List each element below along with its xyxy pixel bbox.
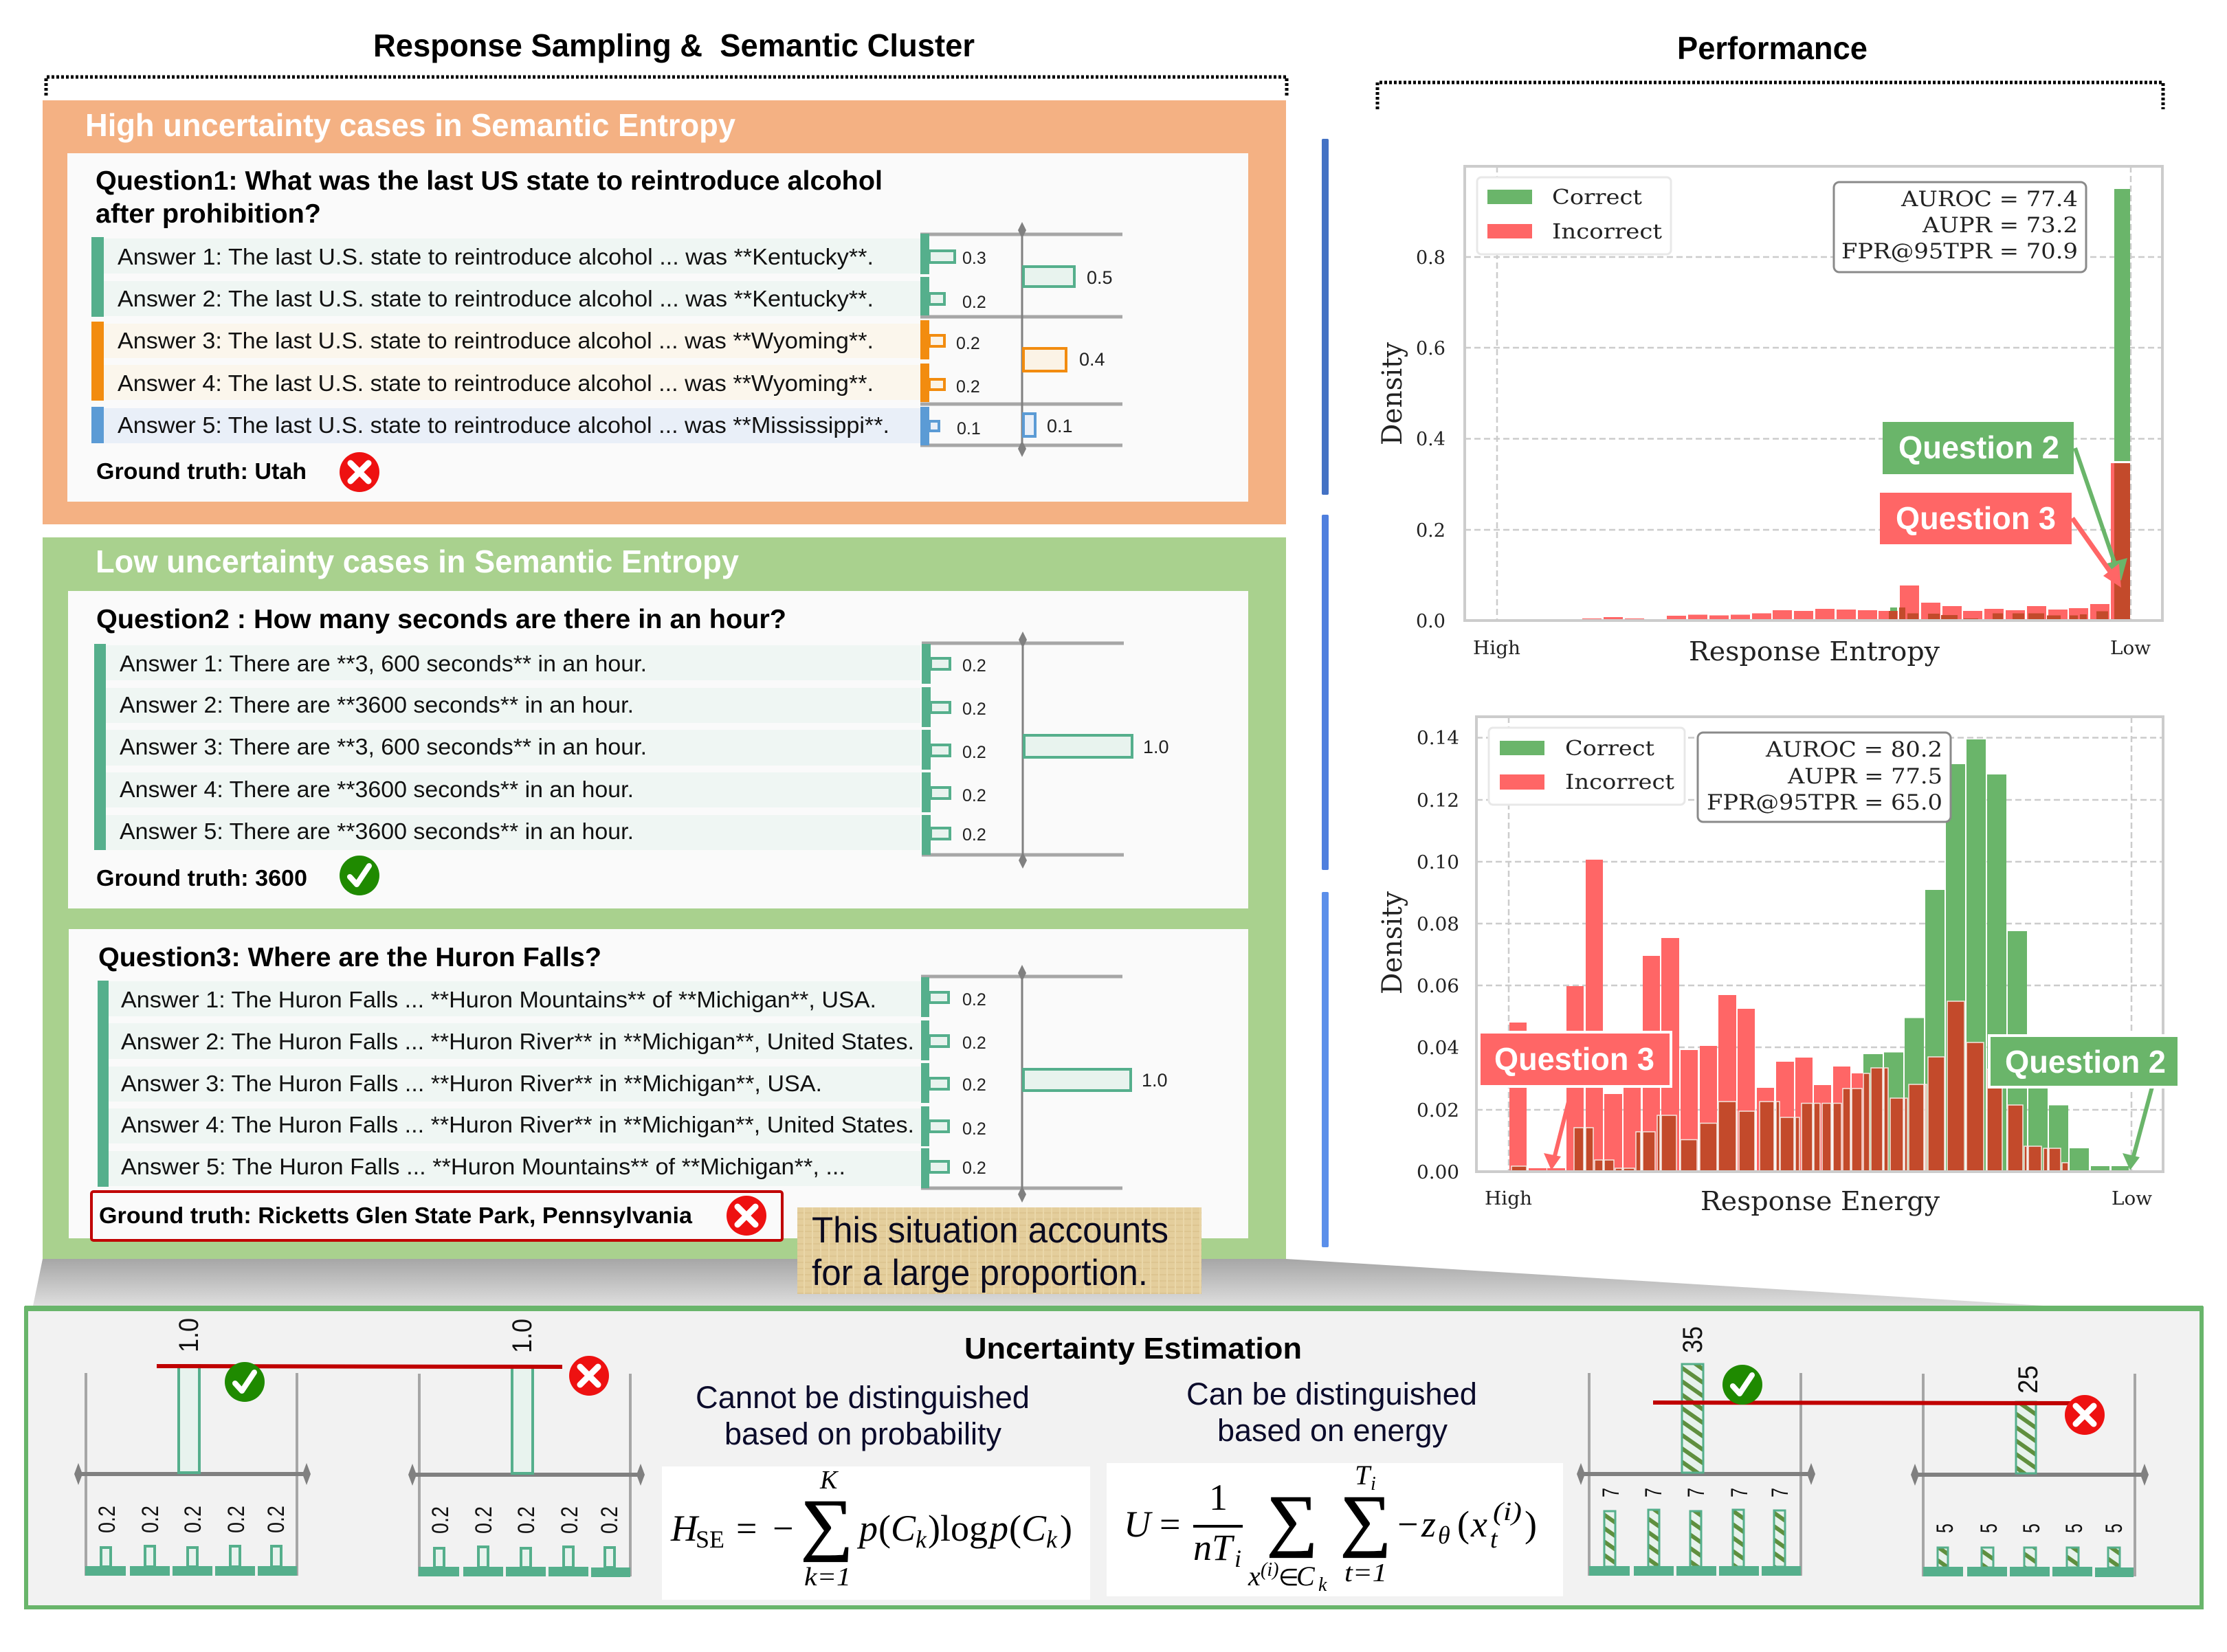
formula: energy: ( xyxy=(1457,1504,1470,1545)
formula: energy xyxy=(1107,1460,1563,1596)
formula: semantic entropy: K xyxy=(819,1466,839,1495)
callout: large proportion note: This situation accounts xyxy=(812,1210,1168,1251)
answers for question 1: Answer 1: The last U.S. state to reintroduce alcohol ... was **Kentucky**. xyxy=(118,244,874,269)
bar chart: probability, correct: 1.0 xyxy=(174,1318,204,1352)
y axis ticks: 0.10 xyxy=(1417,852,1459,873)
formula: semantic entropy: k xyxy=(916,1526,927,1553)
accent bar: light blue xyxy=(1322,892,1329,1247)
legend: Incorrect xyxy=(1552,220,1662,244)
bar chart: question 2 clusters: 0.2 xyxy=(962,743,986,762)
x axis labels: Response Energy xyxy=(1700,1186,1940,1216)
bar chart: question 3 clusters xyxy=(921,965,1168,1203)
formula: energy: T xyxy=(1355,1460,1372,1491)
x axis labels xyxy=(1473,636,2151,667)
formula: semantic entropy: SE xyxy=(696,1526,724,1553)
bar chart: probability, wrong: 1.0 xyxy=(507,1319,538,1353)
answers for question 2: Answer 2: There are **3600 seconds** in an hour. xyxy=(120,692,634,717)
x axis labels: Low xyxy=(2112,1188,2152,1209)
legend: Correct xyxy=(1552,186,1642,210)
card: question 2 xyxy=(68,591,1248,908)
icon: correct xyxy=(225,1362,265,1402)
heading: response sampling and semantic cluster: Response Sampling & Semantic Cluster xyxy=(373,27,975,63)
formula: energy: t xyxy=(1490,1525,1498,1554)
y axis ticks: 0.08 xyxy=(1417,914,1459,935)
bar chart: question 2 clusters: 1.0 xyxy=(1143,737,1169,757)
bar chart: probability, wrong: 0.2 xyxy=(557,1506,583,1534)
bar chart: probability, correct: 0.2 xyxy=(223,1506,250,1533)
panel: high uncertainty cases xyxy=(43,100,1286,524)
formula: energy: ) xyxy=(1525,1504,1537,1545)
bar chart: energy, correct: 7 xyxy=(1598,1488,1624,1497)
formula: energy: nT xyxy=(1193,1527,1235,1568)
stats box xyxy=(1698,733,1951,822)
bar chart: probability, wrong: 0.2 xyxy=(513,1506,540,1534)
chart: response entropy histogram xyxy=(1377,166,2162,667)
x axis labels: High xyxy=(1473,638,1520,659)
bar chart: energy, wrong: 5 xyxy=(2061,1523,2087,1533)
question 1 text: Question1: What was the last US state to reintroduce alcohol xyxy=(96,166,883,196)
x axis labels: Response Entropy xyxy=(1689,636,1940,667)
formula: energy: z xyxy=(1421,1504,1436,1545)
threshold line: probability xyxy=(157,1366,562,1367)
note: cannot be distinguished: based on probability xyxy=(724,1416,1001,1451)
y axis label: Density xyxy=(1377,891,1408,994)
bracket: performance section xyxy=(1377,82,2163,109)
bar chart: question 2 clusters: 0.2 xyxy=(962,825,986,845)
bar chart: energy, correct: 7 xyxy=(1683,1488,1709,1497)
heading: low uncertainty: Low uncertainty cases in Semantic Entropy xyxy=(96,544,739,579)
legend: Correct xyxy=(1565,737,1654,761)
bar chart: question 3 clusters: 0.2 xyxy=(962,1075,986,1095)
icon: wrong xyxy=(727,1196,766,1236)
bar chart: question 1 clusters: 0.2 xyxy=(962,293,986,312)
stats box: AUPR = 77.5 xyxy=(1787,764,1942,789)
label: question 3 with arrow xyxy=(1479,1032,1671,1170)
y axis ticks: 0.12 xyxy=(1417,790,1459,812)
panel: low uncertainty cases xyxy=(43,537,1286,1259)
bar chart: energy, correct: 7 xyxy=(1727,1488,1753,1497)
ground truth: Utah: Ground truth: Utah xyxy=(96,458,307,484)
bar chart: probability, wrong: 0.2 xyxy=(597,1506,623,1534)
y axis ticks: 0.6 xyxy=(1416,338,1445,359)
bar chart: question 3 clusters: 0.2 xyxy=(962,1119,986,1139)
stats box: AUROC = 80.2 xyxy=(1765,737,1942,762)
bar chart: energy, correct: 7 xyxy=(1767,1488,1793,1497)
legend xyxy=(1477,177,1671,254)
question 1 text: after prohibition? xyxy=(96,199,321,229)
answers for question 2 xyxy=(94,644,920,850)
callout: ground truth Ricketts Glen xyxy=(91,1192,782,1240)
label: question 2 with arrow xyxy=(1883,422,2127,581)
chart: response energy histogram xyxy=(1377,717,2179,1216)
formula: semantic entropy: C xyxy=(891,1508,916,1549)
bar chart: question 3 clusters: 0.2 xyxy=(962,990,986,1009)
card: question 3 xyxy=(69,929,1248,1238)
icon: wrong xyxy=(340,452,379,492)
formula: energy: ∑ xyxy=(1267,1482,1318,1558)
accent bar: mid blue xyxy=(1322,515,1329,870)
formula: semantic entropy: ( xyxy=(1009,1508,1021,1549)
note: can be distinguished xyxy=(1186,1376,1477,1448)
bar chart: probability, wrong: 0.2 xyxy=(428,1506,454,1534)
heading: performance: Performance xyxy=(1677,30,1868,66)
callout: ground truth Ricketts Glen: Ground truth: Ricketts Glen State Park, Pennsylvania xyxy=(99,1203,693,1228)
panel: uncertainty estimation xyxy=(25,1306,2203,1607)
card: question 1 xyxy=(67,153,1248,502)
note: can be distinguished: Can be distinguished xyxy=(1186,1376,1477,1411)
answers for question 3 xyxy=(98,981,920,1187)
heading: high uncertainty: High uncertainty cases in Semantic Entropy xyxy=(85,107,735,143)
stats box xyxy=(1834,182,2086,272)
y axis ticks: 0.04 xyxy=(1417,1038,1459,1059)
note: cannot be distinguished: Cannot be distinguished xyxy=(696,1380,1030,1415)
y axis ticks: 0.8 xyxy=(1416,247,1445,269)
y axis ticks: 0.14 xyxy=(1417,728,1459,749)
answers for question 2: Answer 3: There are **3, 600 seconds** in an hour. xyxy=(120,734,647,759)
stats box: FPR@95TPR = 70.9 xyxy=(1841,239,2078,264)
bar chart: question 1 clusters: 0.2 xyxy=(956,377,980,397)
bar chart: energy, correct: 35 xyxy=(1678,1326,1708,1353)
formula: energy: C xyxy=(1296,1561,1316,1592)
answers for question 2: Answer 5: There are **3600 seconds** in an hour. xyxy=(120,818,634,844)
bar chart: question 1 clusters: 0.1 xyxy=(957,419,981,438)
bars: incorrect xyxy=(1509,860,1870,1172)
formula: semantic entropy: ( xyxy=(878,1508,891,1549)
label: question 2 with arrow: Question 2 xyxy=(2005,1044,2166,1080)
answers for question 1 xyxy=(91,237,920,443)
bar chart: question 1 clusters: 0.4 xyxy=(1079,349,1105,370)
bar chart: probability, correct xyxy=(74,1318,311,1576)
bar chart: probability, correct: 0.2 xyxy=(137,1506,164,1533)
question 1 text xyxy=(96,166,883,229)
formula: energy: (i) xyxy=(1261,1559,1278,1581)
answers for question 3: Answer 3: The Huron Falls ... **Huron River** in **Michigan**, USA. xyxy=(121,1071,822,1096)
formula: energy: i xyxy=(1371,1473,1376,1495)
formula: energy: = xyxy=(1160,1504,1180,1545)
y axis ticks: 0.4 xyxy=(1416,429,1445,450)
y axis label: Density xyxy=(1377,342,1408,445)
formula: energy: ∑ xyxy=(1340,1482,1391,1558)
bar chart: question 1 clusters: 0.5 xyxy=(1087,267,1113,288)
bar chart: probability, wrong: 0.2 xyxy=(471,1506,497,1534)
bars: correct xyxy=(1890,189,2130,612)
bar chart: energy, wrong xyxy=(1911,1365,2149,1577)
bar chart: probability, correct: 0.2 xyxy=(94,1506,120,1533)
bar chart: question 2 clusters: 0.2 xyxy=(962,700,986,719)
bar chart: question 1 clusters xyxy=(920,222,1122,457)
answers for question 1: Answer 4: The last U.S. state to reintroduce alcohol ... was **Wyoming**. xyxy=(118,370,874,396)
formula: energy: 1 xyxy=(1209,1477,1228,1518)
label: question 2 with arrow: Question 2 xyxy=(1898,429,2059,465)
callout: large proportion note xyxy=(797,1207,1201,1294)
legend xyxy=(1489,728,1685,805)
formula: energy: x xyxy=(1248,1561,1261,1592)
bar chart: probability, correct: 0.2 xyxy=(263,1506,289,1533)
answers for question 3: Answer 5: The Huron Falls ... **Huron Mountains** of **Michigan**, ... xyxy=(121,1154,845,1179)
x axis labels xyxy=(1485,1186,2152,1216)
y axis ticks: 0.2 xyxy=(1416,520,1445,542)
formula: semantic entropy: = xyxy=(736,1508,757,1549)
bar chart: question 3 clusters: 0.2 xyxy=(962,1159,986,1178)
formula: semantic entropy: − xyxy=(773,1508,793,1549)
formula: semantic entropy: )log xyxy=(928,1508,988,1549)
formula: semantic entropy: ∑ xyxy=(801,1486,853,1562)
note: cannot be distinguished xyxy=(696,1380,1030,1451)
bar chart: question 3 clusters: 1.0 xyxy=(1142,1070,1168,1091)
question 3 text: Question3: Where are the Huron Falls? xyxy=(98,943,601,972)
question 2 text: Question2 : How many seconds are there in an hour? xyxy=(96,605,786,634)
bar chart: energy, wrong: 25 xyxy=(2013,1365,2043,1394)
formula: energy: (i) xyxy=(1493,1497,1522,1526)
accent bar: blue xyxy=(1322,139,1329,495)
y axis ticks: 0.00 xyxy=(1417,1162,1459,1183)
bar chart: probability, wrong xyxy=(408,1319,645,1577)
y axis ticks xyxy=(1416,247,1445,632)
bar chart: probability, correct: 0.2 xyxy=(180,1506,206,1533)
bars: overlap xyxy=(1511,1001,2068,1172)
connector: gray shadow from panels to uncertainty estimation xyxy=(32,1259,2043,1313)
formula: semantic entropy xyxy=(662,1466,1090,1600)
formula: energy: k xyxy=(1318,1574,1327,1596)
answers for question 3: Answer 2: The Huron Falls ... **Huron River** in **Michigan**, United States. xyxy=(121,1029,914,1054)
bar chart: question 2 clusters: 0.2 xyxy=(962,656,986,676)
icon: correct xyxy=(340,856,379,895)
bar chart: question 2 clusters: 0.2 xyxy=(962,786,986,805)
formula: semantic entropy: p xyxy=(987,1508,1008,1549)
formula: semantic entropy: k=1 xyxy=(804,1563,851,1592)
formula: semantic entropy: p xyxy=(856,1508,878,1549)
stats box: AUPR = 73.2 xyxy=(1922,213,2078,238)
bar chart: energy, wrong: 5 xyxy=(2019,1523,2045,1533)
icon: wrong xyxy=(2065,1395,2105,1435)
x axis labels: Low xyxy=(2110,638,2151,659)
answers for question 3: Answer 4: The Huron Falls ... **Huron River** in **Michigan**, United States. xyxy=(121,1112,914,1137)
ground truth: 3600: Ground truth: 3600 xyxy=(96,865,307,891)
x axis labels: High xyxy=(1485,1188,1532,1209)
formula: semantic entropy: C xyxy=(1021,1508,1047,1549)
formula: energy: t=1 xyxy=(1344,1559,1387,1587)
bar chart: question 3 clusters: 0.2 xyxy=(962,1034,986,1053)
label: question 3 with arrow xyxy=(1880,493,2121,588)
answers for question 2: Answer 1: There are **3, 600 seconds** in an hour. xyxy=(120,651,647,676)
answers for question 2: Answer 4: There are **3600 seconds** in an hour. xyxy=(120,777,634,802)
bar chart: energy, wrong: 5 xyxy=(1976,1523,2002,1533)
callout: large proportion note: for a large proportion. xyxy=(812,1253,1148,1293)
bar chart: question 1 clusters: 0.2 xyxy=(956,334,980,353)
formula: semantic entropy: H xyxy=(670,1508,700,1549)
bar chart: question 1 clusters: 0.3 xyxy=(962,249,986,268)
formula: energy: U xyxy=(1124,1504,1153,1545)
formula: energy: − xyxy=(1397,1504,1418,1545)
heading: uncertainty estimation: Uncertainty Estimation xyxy=(964,1332,1302,1365)
label: question 2 with arrow xyxy=(1989,1036,2179,1170)
bracket: left section xyxy=(46,77,1287,96)
bar chart: question 1 clusters: 0.1 xyxy=(1047,416,1073,436)
bar chart: energy, correct: 7 xyxy=(1641,1488,1667,1497)
formula: energy: θ xyxy=(1438,1521,1450,1549)
legend: Incorrect xyxy=(1565,770,1674,794)
answers for question 1: Answer 3: The last U.S. state to reintroduce alcohol ... was **Wyoming**. xyxy=(118,328,874,353)
bars: overlap xyxy=(1889,463,2130,621)
bar chart: energy, wrong: 5 xyxy=(1932,1523,1958,1533)
note: can be distinguished: based on energy xyxy=(1217,1413,1448,1448)
formula: semantic entropy: k xyxy=(1046,1526,1058,1553)
icon: correct xyxy=(1722,1365,1762,1405)
answers for question 3: Answer 1: The Huron Falls ... **Huron Mountains** of **Michigan**, USA. xyxy=(121,987,876,1012)
icon: wrong xyxy=(569,1356,609,1396)
y axis ticks: 0.02 xyxy=(1417,1100,1459,1121)
bar chart: energy, wrong: 5 xyxy=(2101,1523,2127,1533)
formula: energy: ∈ xyxy=(1278,1565,1299,1591)
formula: energy: x xyxy=(1470,1504,1487,1545)
stats box: AUROC = 77.4 xyxy=(1901,187,2078,212)
formula: semantic entropy: ) xyxy=(1060,1508,1072,1549)
bars: incorrect xyxy=(1561,463,2114,621)
formula: energy: i xyxy=(1234,1545,1241,1572)
bars: correct xyxy=(1863,739,2129,1172)
y axis ticks: 0.06 xyxy=(1417,976,1459,997)
answers for question 1: Answer 2: The last U.S. state to reintroduce alcohol ... was **Kentucky**. xyxy=(118,286,874,311)
bar chart: question 2 clusters xyxy=(922,632,1169,869)
answers for question 1: Answer 5: The last U.S. state to reintroduce alcohol ... was **Mississippi**. xyxy=(118,412,889,438)
y axis ticks xyxy=(1417,728,1459,1183)
stats box: FPR@95TPR = 65.0 xyxy=(1707,790,1942,815)
label: question 3 with arrow: Question 3 xyxy=(1896,500,2056,536)
bar chart: energy, correct xyxy=(1577,1326,1815,1576)
label: question 3 with arrow: Question 3 xyxy=(1494,1041,1654,1077)
y axis ticks: 0.0 xyxy=(1416,611,1445,632)
